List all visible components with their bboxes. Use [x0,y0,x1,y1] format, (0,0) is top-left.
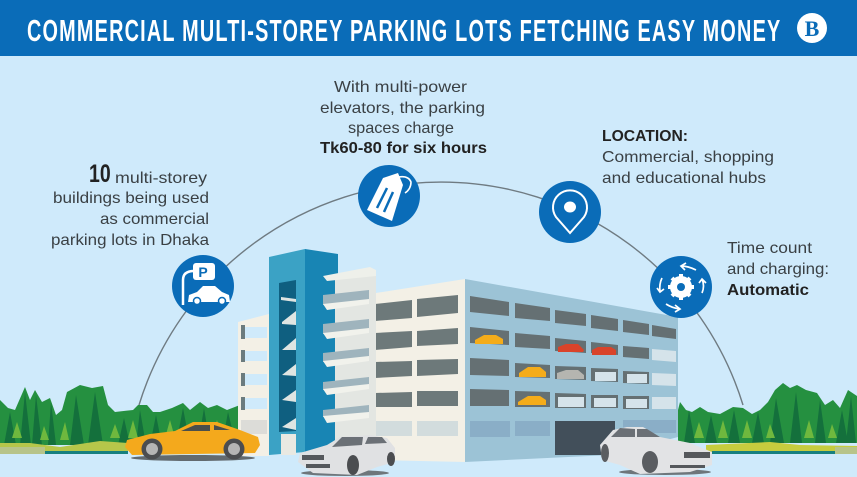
cream facade [375,279,465,462]
text: time count [727,240,829,299]
text: buildings count: buildings being used [53,190,209,207]
header bar [0,0,857,56]
text: charges: spaces charge [348,120,454,137]
car: yellow [125,422,260,461]
text: buildings count: 10 [89,160,111,188]
parked cars [475,335,616,405]
text: location: and educational hubs [602,170,766,187]
text: charges: elevators, the parking [320,100,485,117]
blue stair tower [269,249,338,455]
text: location: LOCATION: [602,128,688,145]
icon: gear with arrows [650,256,712,318]
logo: B [805,16,820,41]
icon: parking: P [198,264,208,280]
blue facade windows [470,296,676,455]
text: location: Commercial, shopping [602,149,774,166]
text: charges: With multi-power [334,79,468,96]
blue side facade [465,279,678,462]
trees left [0,385,240,454]
trees right [678,383,857,454]
icon: price tag [358,165,420,227]
icon: location pin [539,181,601,243]
text: time count: Automatic [727,282,809,299]
text: time count: Time count [727,240,813,257]
text: charges [320,79,487,157]
left wing [238,314,269,456]
text: buildings count: multi-storey [115,170,207,187]
title: COMMERCIAL MULTI-STOREY PARKING LOTS FETCHING EASY MONEY [27,12,780,48]
text: buildings count [51,160,209,249]
car: white centre [298,435,395,476]
text: location [602,128,774,187]
logo [797,13,827,43]
text: buildings count: as commercial [100,211,209,228]
text: charges: Tk60-80 for six hours [320,140,487,157]
text: time count: and charging: [727,261,829,278]
arc connector [139,182,743,405]
icon: parking [172,255,234,317]
balcony column [323,267,376,445]
text: buildings count: parking lots in Dhaka [51,232,209,249]
car: white right [600,427,712,475]
parking building [238,249,678,462]
